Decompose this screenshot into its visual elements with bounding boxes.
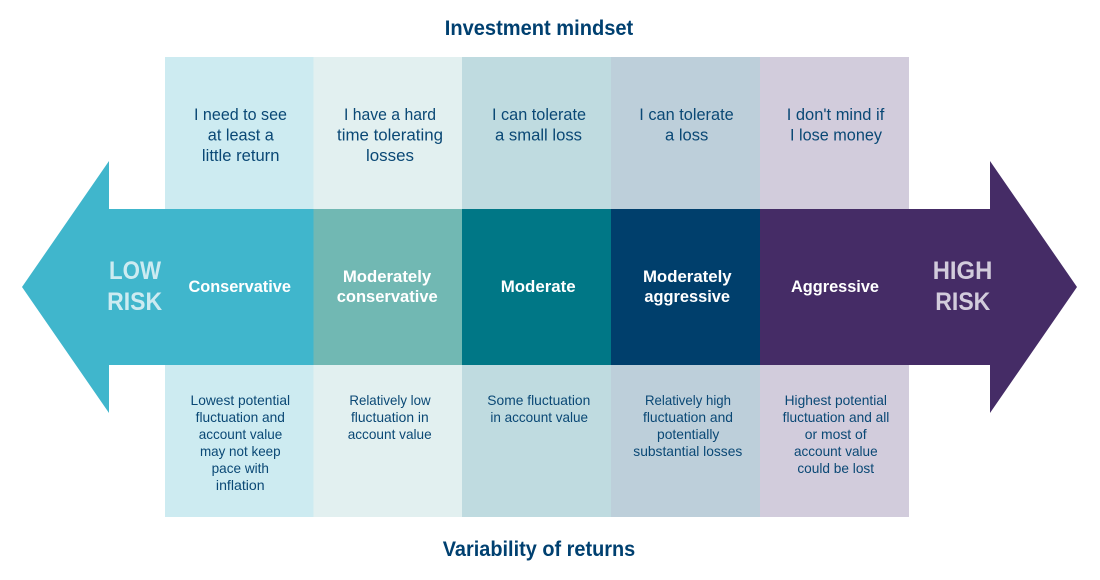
panel: moderately aggressive variability: potentially [657, 426, 719, 442]
panel: moderately aggressive variability: Relatively high [645, 392, 731, 408]
panel: conservative variability: fluctuation and [196, 409, 285, 425]
panel: moderately aggressive variability [611, 365, 760, 517]
label: moderately conservative [337, 267, 438, 306]
heading: variability of returns: Variability of returns [443, 538, 635, 561]
band: moderately aggressive [611, 209, 760, 365]
panel: moderately conservative mindset: time tolerating [337, 126, 443, 144]
panel: moderately conservative variability: fluctuation in [351, 409, 429, 425]
panel: moderately aggressive mindset: I can tolerate [639, 106, 734, 124]
panel: moderate variability: Some fluctuation [487, 392, 590, 408]
panel: moderately conservative mindset: losses [366, 147, 414, 165]
panel: conservative variability: may not keep [200, 443, 281, 459]
panel: investment mindset row [165, 57, 909, 209]
panel: aggressive mindset: I lose money [790, 126, 883, 144]
arrow: high risk: RISK [935, 288, 990, 316]
panel: moderately aggressive mindset [611, 57, 760, 209]
panel: conservative variability [165, 365, 314, 517]
label: moderately conservative: conservative [337, 287, 438, 306]
label: moderately aggressive: Moderately [643, 267, 732, 286]
panel: moderate variability: in account value [490, 409, 588, 425]
panel: aggressive variability: account value [794, 443, 878, 459]
panel: aggressive mindset [760, 57, 909, 209]
label: moderately aggressive: aggressive [644, 287, 730, 306]
panel: conservative variability: inflation [216, 477, 265, 493]
arrow: high risk [760, 161, 1077, 413]
panel: moderately conservative variability: Relatively low [349, 392, 431, 408]
band: moderately conservative [314, 209, 462, 365]
panel: aggressive mindset: I don't mind if [787, 106, 885, 124]
panel: moderately conservative variability: account value [348, 426, 432, 442]
panel: conservative mindset [165, 57, 314, 209]
panel: moderate mindset [462, 57, 611, 209]
panel: moderately aggressive variability: substantial losses [633, 443, 742, 459]
panel: aggressive variability: could be lost [797, 460, 874, 476]
panel: conservative variability: pace with [212, 460, 269, 476]
arrow: low risk [22, 161, 314, 413]
panel: conservative mindset: at least a [208, 126, 275, 144]
panel: moderate mindset: I can tolerate [492, 106, 586, 124]
band: moderate [462, 209, 611, 365]
label: conservative: Conservative [188, 277, 291, 296]
panel: conservative mindset: little return [202, 147, 279, 165]
arrow: low risk: RISK [107, 288, 162, 316]
arrow: high risk: HIGH [933, 257, 992, 285]
panel: conservative variability: Lowest potential [191, 392, 290, 408]
panel: aggressive variability [760, 365, 909, 517]
panel: moderately conservative variability [314, 365, 462, 517]
panel: aggressive variability: fluctuation and all [783, 409, 889, 425]
arrow: low risk: LOW [109, 257, 161, 285]
panel: moderately conservative mindset [314, 57, 462, 209]
panel: aggressive variability: Highest potential [785, 392, 887, 408]
panel: moderate variability [462, 365, 611, 517]
label: moderately aggressive [643, 267, 732, 306]
label: moderately conservative: Moderately [343, 267, 432, 286]
panel: moderately aggressive mindset: a loss [665, 126, 708, 144]
panel: moderately conservative mindset: I have a hard [344, 106, 436, 124]
panel: variability of returns row [165, 365, 909, 517]
label: moderate: Moderate [501, 277, 576, 296]
panel: conservative mindset: I need to see [194, 106, 287, 124]
heading: investment mindset: Investment mindset [445, 17, 633, 40]
panel: moderately aggressive variability: fluctuation and [643, 409, 733, 425]
panel: conservative variability: account value [199, 426, 282, 442]
panel: aggressive variability: or most of [805, 426, 867, 442]
panel: moderate mindset: a small loss [495, 126, 582, 144]
risk profile labels [188, 267, 879, 306]
label: aggressive: Aggressive [791, 277, 879, 296]
